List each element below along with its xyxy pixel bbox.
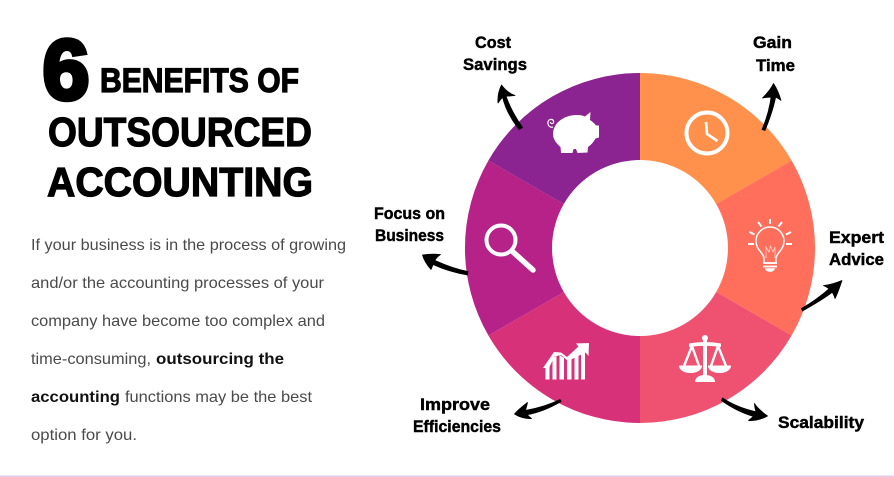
body text: option for you. <box>31 427 137 444</box>
label: expert advice: Expert <box>829 228 884 247</box>
title line: accounting: ACCOUNTING <box>47 159 313 205</box>
arrow: focus on business <box>422 254 468 275</box>
icon: clock <box>686 112 728 154</box>
body text: accounting <box>31 389 120 406</box>
label: improve efficiencies: Efficiencies <box>413 417 501 436</box>
label: expert advice <box>829 228 884 269</box>
label: gain time: Gain <box>753 33 792 52</box>
icon: piggy bank <box>548 112 599 153</box>
arrow: scalability <box>722 398 768 421</box>
label: focus on business: Business <box>375 226 444 245</box>
body text: outsourcing the <box>156 351 284 368</box>
segment: expert advice <box>716 160 815 336</box>
title numeral 6: 6 <box>42 23 90 118</box>
title line: benefits of: BENEFITS OF <box>100 62 299 100</box>
arrow: expert advice <box>802 280 842 311</box>
icon: balance scales <box>679 335 731 382</box>
body text: company have become too complex and <box>31 313 325 330</box>
label: improve efficiencies <box>413 395 501 436</box>
arrow: improve efficiencies <box>514 400 561 419</box>
body text: and/or the accounting processes of your <box>31 275 325 292</box>
body text <box>31 237 346 444</box>
segment: gain time <box>640 73 792 204</box>
icon: light bulb <box>748 219 792 271</box>
segment: cost savings <box>488 73 640 204</box>
body text: If your business is in the process of growing <box>31 237 346 254</box>
arrow: cost savings <box>498 85 522 130</box>
segment: scalability <box>640 292 792 423</box>
label: gain time: Time <box>756 56 795 75</box>
icon: magnifying glass <box>486 226 533 270</box>
segment: focus on business <box>465 160 564 336</box>
icon: rising bar chart <box>543 343 589 380</box>
label: cost savings: Savings <box>463 55 527 74</box>
body text: time-consuming, <box>31 351 151 368</box>
segment: improve efficiencies <box>488 292 640 423</box>
label: focus on business <box>374 204 445 245</box>
arrow: gain time <box>762 84 781 130</box>
title <box>42 23 313 205</box>
title line: outsourced: OUTSOURCED <box>48 109 312 155</box>
label: expert advice: Advice <box>829 250 884 269</box>
donut chart <box>465 73 815 423</box>
label: gain time <box>753 33 795 75</box>
label: scalability: Scalability <box>778 413 865 432</box>
body text: functions may be the best <box>125 389 313 406</box>
label: focus on business: Focus on <box>374 204 445 223</box>
label: cost savings: Cost <box>475 33 511 52</box>
label: cost savings <box>463 33 527 74</box>
bottom rule <box>0 476 894 477</box>
label: improve efficiencies: Improve <box>420 395 490 414</box>
